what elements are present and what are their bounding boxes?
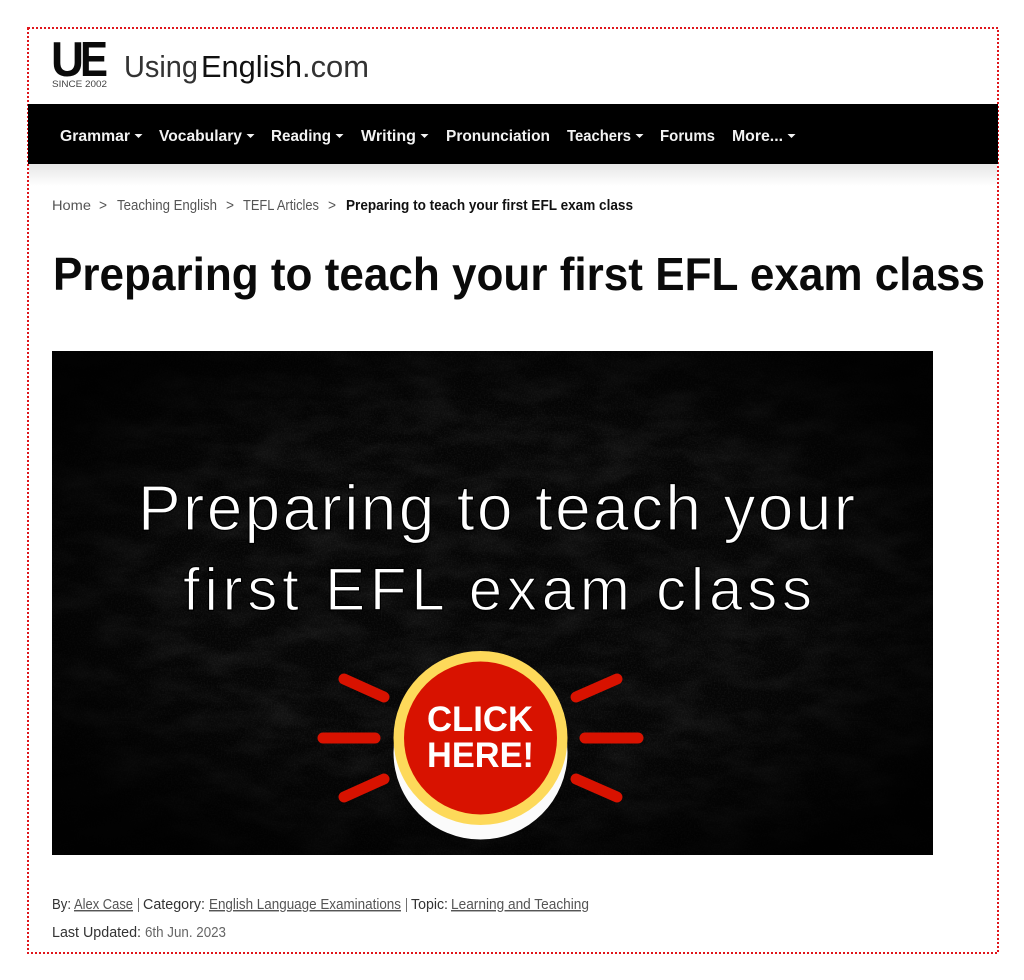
navigation items: Pronunciation xyxy=(446,128,550,145)
navigation items: Writing xyxy=(361,128,416,145)
chalk heading: first EFL exam class xyxy=(183,556,812,623)
site name: UsingEnglish.com: English xyxy=(201,49,302,84)
click here button xyxy=(394,651,568,840)
navigation items: Reading xyxy=(271,128,331,145)
site name: UsingEnglish.com xyxy=(124,49,369,84)
breadcrumb: > xyxy=(328,198,336,214)
navigation shadow xyxy=(29,164,997,186)
author, category and topic line: Topic: xyxy=(411,897,448,913)
navigation items: Teachers xyxy=(567,128,631,145)
author, category and topic line: | xyxy=(137,897,140,913)
author, category and topic line: Alex Case xyxy=(74,897,133,913)
breadcrumb: Home xyxy=(52,197,91,213)
chalk heading: Preparing to teach your xyxy=(138,472,855,544)
author, category and topic line: By: xyxy=(52,897,71,913)
click here button: HERE! xyxy=(427,736,534,775)
navigation bar xyxy=(28,104,998,164)
last updated line xyxy=(52,925,226,941)
navigation items: Vocabulary xyxy=(159,128,242,145)
navigation items: Forums xyxy=(660,128,715,145)
chalk heading xyxy=(138,472,855,623)
author, category and topic line: Category: xyxy=(143,897,205,913)
site logo xyxy=(51,33,369,89)
breadcrumb: Preparing to teach your first EFL exam class xyxy=(346,198,633,214)
breadcrumb: > xyxy=(99,198,107,214)
author, category and topic line xyxy=(52,897,589,913)
author, category and topic line: | xyxy=(405,897,408,913)
navigation items: Grammar xyxy=(60,128,130,145)
navigation items xyxy=(60,128,796,145)
author, category and topic line: English Language Examinations xyxy=(209,897,401,913)
breadcrumb: TEFL Articles xyxy=(243,198,319,214)
logo mark: UE: E xyxy=(80,33,108,87)
last updated line: 6th Jun. 2023 xyxy=(145,925,226,941)
click here button: CLICK xyxy=(427,700,533,739)
navigation items: More... xyxy=(732,128,783,145)
breadcrumb: > xyxy=(226,198,234,214)
site name: UsingEnglish.com: .com xyxy=(302,49,369,84)
author, category and topic line: Learning and Teaching xyxy=(451,897,589,913)
breadcrumb xyxy=(52,197,633,214)
last updated line: Last Updated: xyxy=(52,925,141,941)
logo mark: UE: U xyxy=(51,33,84,87)
site name: UsingEnglish.com: Using xyxy=(124,49,198,84)
page title: Preparing to teach your first EFL exam class xyxy=(53,248,985,300)
logo mark: UE xyxy=(51,33,108,87)
chalkboard background xyxy=(52,351,933,855)
hero image: chalkboard with click button xyxy=(52,351,933,855)
logo tagline: since 2002: SINCE 2002 xyxy=(52,79,107,89)
click here rays xyxy=(323,679,638,797)
breadcrumb: Teaching English xyxy=(117,198,217,214)
article metadata xyxy=(52,897,589,941)
